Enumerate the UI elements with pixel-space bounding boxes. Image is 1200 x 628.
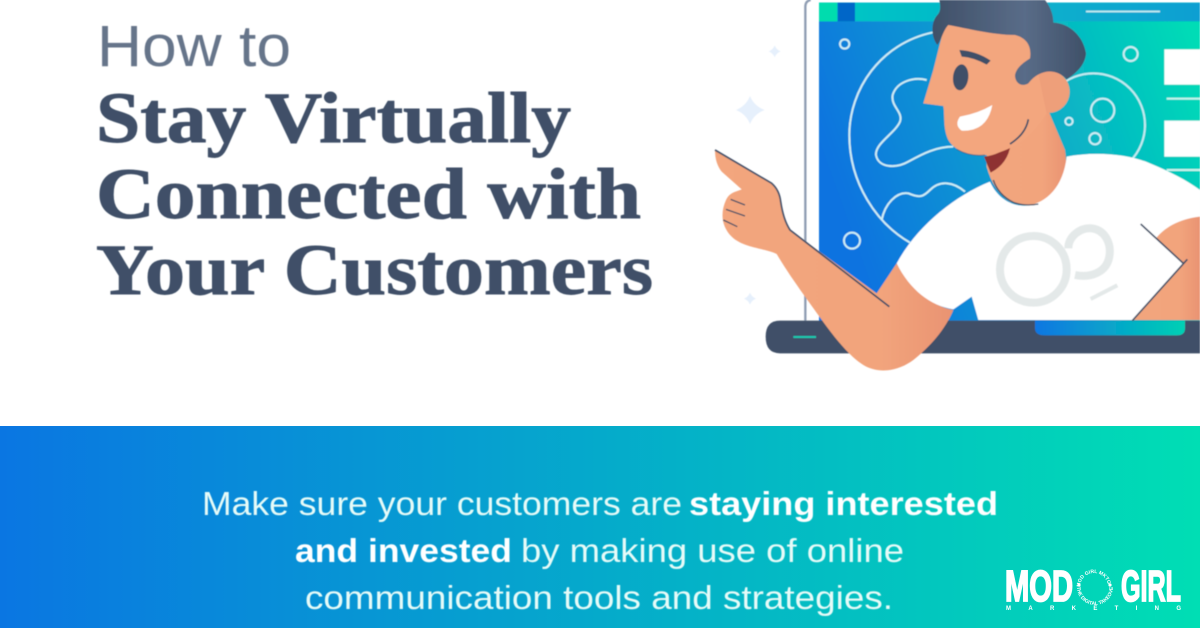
man: pointing arm and hand [715, 150, 953, 370]
line 1: Make sure your customers are [202, 485, 682, 522]
laptop base [766, 321, 1200, 353]
screen content blocks [1164, 49, 1200, 85]
chin line [957, 149, 985, 155]
line 1 bold: staying interested [689, 485, 998, 522]
heading line: your customers: Your Customers [96, 230, 653, 310]
gradient band [0, 426, 1200, 628]
line 2 bold: and invested [295, 532, 512, 569]
man: head [923, 0, 1086, 205]
logo ring text: THE DIGITAL TAKEOVER [1077, 586, 1113, 606]
man: mouth shadow [984, 144, 1011, 173]
logo word: mod: MOD [1005, 562, 1073, 611]
laptop frame [805, 0, 811, 322]
man: neck [987, 107, 1066, 205]
globe line art [840, 32, 1145, 249]
body text [202, 485, 998, 616]
screen header strip [819, 3, 1200, 21]
line 3: communication tools and strategies. [305, 579, 893, 616]
logo ring text: MOD GIRL MKTG [1076, 570, 1111, 587]
logo tagline: MARKETING [1006, 606, 1181, 612]
icon: sparkles [736, 45, 781, 305]
heading line: stay virtually: Stay Virtually [96, 78, 571, 158]
hair [932, 0, 1086, 85]
illustration: man pointing out of a laptop [715, 0, 1200, 370]
title [96, 14, 653, 310]
man: right arm [1133, 217, 1200, 320]
neck line [993, 180, 1038, 205]
laptop screen [819, 3, 1200, 321]
smile line [1010, 119, 1028, 144]
eye [952, 64, 970, 91]
smile [957, 105, 992, 131]
shirt logo [1000, 228, 1117, 303]
ear [1027, 70, 1070, 113]
line 2: by making use of online [521, 532, 904, 569]
man: t-shirt [897, 154, 1200, 320]
face [923, 23, 1047, 155]
eyebrow [959, 50, 991, 65]
finger lines [723, 199, 745, 227]
heading: how to: How to [97, 14, 291, 79]
heading line: connected with: Connected with [96, 154, 641, 234]
